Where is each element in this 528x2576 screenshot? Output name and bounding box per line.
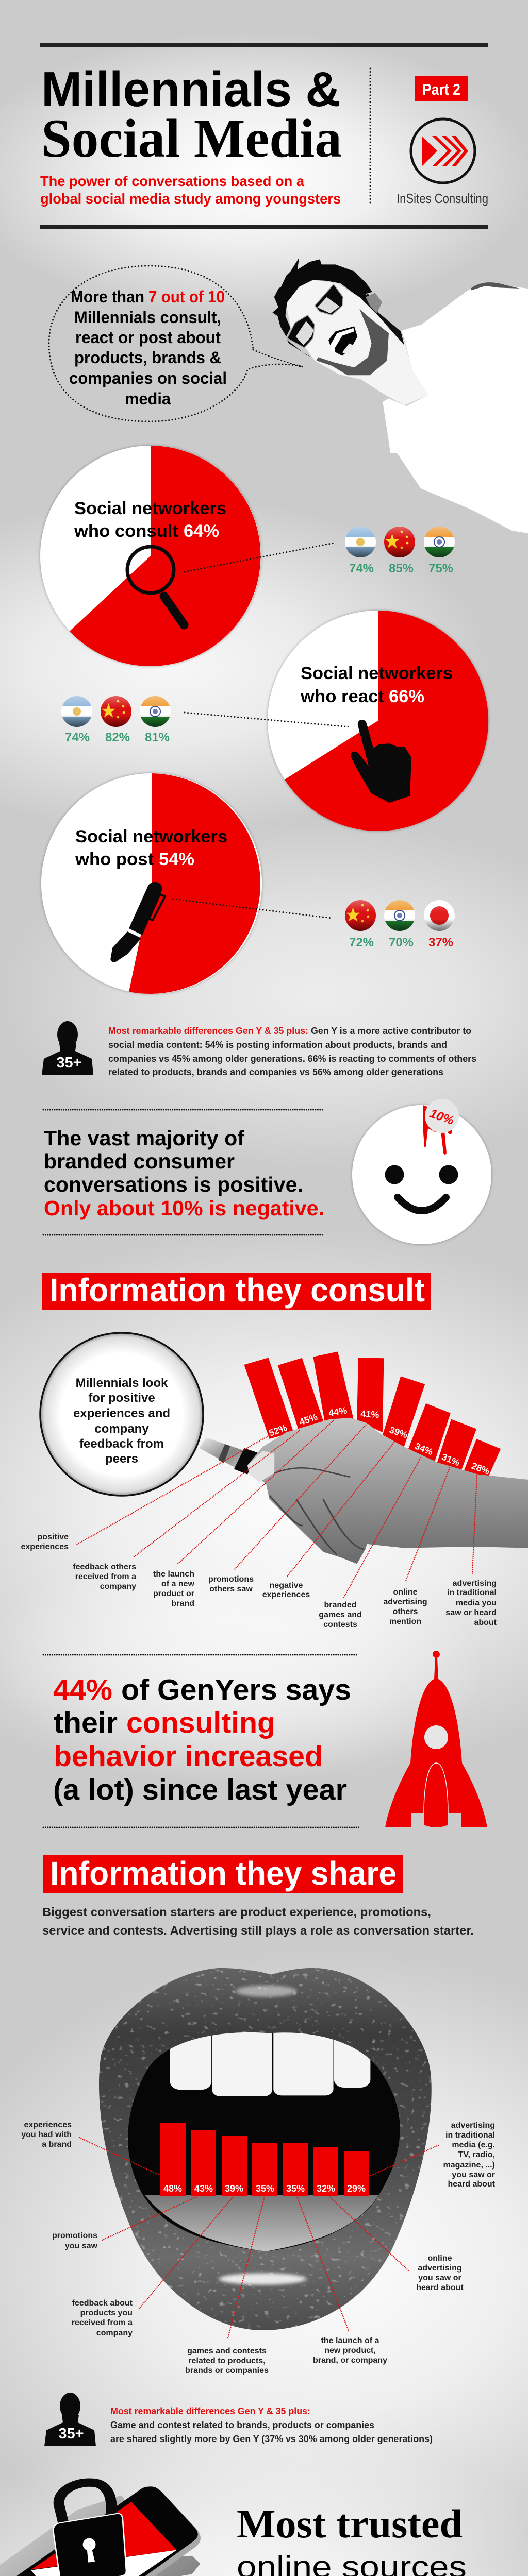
magnifier lens: Millennials look [76, 1376, 168, 1390]
bar fan chart: information consulted: 28% [470, 1461, 491, 1477]
labels: share: related to products, [188, 2357, 266, 2365]
labels: share: a brand [42, 2140, 72, 2149]
labels: consult: company [100, 1582, 136, 1591]
magnifier lens: experiences and [73, 1406, 170, 1420]
magnifier handle [200, 1437, 258, 1475]
speech bubble: react or post about [75, 328, 221, 347]
pie label [74, 499, 226, 541]
differences text: Game and contest related to brands, products or companies [110, 2420, 374, 2430]
share intro text: Biggest conversation starters are product experience, promotions, [42, 1905, 431, 1919]
bar chart: information shared [160, 2123, 369, 2196]
pie label: who post [75, 850, 154, 869]
labels: share: you saw [65, 2242, 98, 2250]
labels: share: you had with [21, 2130, 72, 2139]
labels: consult: the launch [153, 1570, 194, 1579]
labels: consult: brand [172, 1599, 194, 1608]
labels: share: games and contests [187, 2347, 267, 2355]
labels: consult: mention [389, 1617, 421, 1626]
flags: react: 82% [105, 731, 130, 744]
headline: 44% of GenYers: 44% [53, 1673, 112, 1706]
bar fan chart: information consulted: 45% [298, 1412, 319, 1427]
flags: react: 74% [65, 731, 90, 744]
pie label [300, 664, 453, 706]
bar fan chart: information consulted: 44% [328, 1405, 348, 1418]
pie: react [268, 611, 488, 831]
headline: 44% of GenYers: consulting [126, 1706, 275, 1739]
share intro text: service and contests. Advertising still plays a role as conversation starter. [42, 1924, 474, 1937]
icon: smiley with bite [352, 1099, 491, 1244]
bar fan chart: information consulted: 31% [440, 1451, 461, 1468]
labels: consult: promotions [208, 1575, 254, 1584]
padlock [53, 2483, 126, 2576]
bar fan chart: information consulted: 52% [268, 1422, 288, 1438]
lip highlights [219, 1986, 306, 2285]
labels: share: TV, radio, [458, 2150, 495, 2159]
callout: 35+ differences [42, 1021, 476, 1077]
labels: consult: negative [270, 1581, 303, 1590]
icon: person 35+ [42, 1021, 93, 1075]
labels: consult: in traditional [447, 1588, 497, 1597]
headline: positive conversations [44, 1126, 324, 1220]
flags: react: 81% [145, 731, 170, 744]
differences text [110, 2406, 433, 2444]
labels: share: new product, [324, 2346, 376, 2355]
pie label: who react [300, 687, 384, 706]
labels: share: brands or companies [185, 2366, 269, 2375]
labels: consult: of a new [161, 1580, 195, 1588]
flags: consult: 74% [349, 562, 374, 575]
speech bubble: 7 out of 10 [148, 287, 225, 306]
pie label: who consult [74, 521, 178, 541]
labels: consult: others saw [209, 1585, 253, 1594]
differences text: are shared slightly more by Gen Y (37% vs 30% among older generations) [110, 2434, 433, 2444]
speech bubble: media [125, 389, 171, 408]
speech bubble: Millennials consult, [74, 308, 221, 327]
hand [248, 1418, 528, 1564]
pie label: Social networkers [74, 499, 226, 518]
differences text: social media content: 54% is posting information about products, brands and [108, 1040, 447, 1050]
headline: positive conversations: branded consumer [44, 1149, 235, 1173]
labels: consult: product or [153, 1589, 194, 1598]
bar fan chart: information consulted [244, 1351, 501, 1477]
headline: 44% of GenYers [53, 1673, 351, 1806]
leader lines: share [79, 2138, 438, 2338]
heading: most trusted online sources [237, 2501, 467, 2576]
differences text: Most remarkable differences Gen Y & 35 plus: [110, 2406, 310, 2416]
headline: 44% of GenYers: (a lot) since last year [53, 1773, 347, 1806]
flags: consult [344, 526, 455, 575]
flags: post: 72% [349, 936, 374, 950]
flags: consult: 75% [428, 562, 453, 575]
part 2 badge [415, 76, 468, 101]
icon: person 35+: 35+ [58, 2426, 84, 2442]
labels: consult: about [474, 1618, 497, 1627]
icon: person 35+ [44, 2393, 96, 2446]
differences text: related to products, brands and companies vs 56% among older generations [108, 1067, 443, 1077]
bar fan chart: information consulted: 41% [360, 1409, 380, 1420]
InSites logo: InSites Consulting [397, 191, 488, 206]
labels: share [21, 2121, 496, 2375]
bar fan chart: information consulted: 34% [414, 1440, 435, 1457]
phone in hand with padlock [0, 2483, 201, 2576]
flags: post: 70% [389, 936, 414, 950]
labels: consult: contests [323, 1620, 357, 1629]
labels: share: you saw or [452, 2171, 495, 2179]
icon: person 35+: 35+ [56, 1055, 82, 1071]
headline: 44% of GenYers: behavior increased [54, 1740, 323, 1773]
subtitle [40, 173, 341, 207]
headline: 44% of GenYers: their [54, 1706, 118, 1739]
bar chart: information shared: 43% [194, 2183, 213, 2194]
hand with magnifying glass [40, 1333, 528, 1564]
bar chart: information shared: 29% [347, 2183, 366, 2194]
hand [0, 2495, 201, 2576]
labels: consult: experiences [21, 1543, 69, 1551]
InSites logo [397, 119, 488, 206]
speech bubble [49, 266, 303, 421]
differences text: Most remarkable differences Gen Y & 35 plus: [108, 1026, 308, 1036]
magnifier lens: feedback from [79, 1437, 164, 1451]
labels: share: feedback about [72, 2299, 133, 2308]
thumb [248, 1451, 274, 1482]
labels: share: online [427, 2254, 452, 2263]
title line 1: Millennials & [41, 62, 341, 117]
subtitle: The power of conversations based on a [40, 173, 304, 189]
heading: information they share: Information they share [50, 1855, 397, 1892]
labels: share: company [96, 2329, 133, 2337]
headline: positive conversations: Only about 10% is negative. [44, 1196, 324, 1220]
magnifier lens: company [94, 1422, 149, 1436]
labels: share: products you [80, 2309, 133, 2317]
differences text [108, 1026, 476, 1077]
labels: share: in traditional [446, 2131, 495, 2140]
pie label: Social networkers [301, 664, 453, 683]
headline: 44% of GenYers: of GenYers says [121, 1673, 351, 1706]
bar chart: information shared: 48% [163, 2183, 182, 2194]
icon: pen [110, 882, 165, 962]
differences text: Gen Y is a more active contributor to [311, 1026, 471, 1036]
lip gloss specks [99, 1968, 432, 2330]
bar chart: information shared: 35% [256, 2183, 274, 2194]
labels: share: advertising [418, 2264, 462, 2273]
magnifier lens: peers [105, 1452, 138, 1466]
labels: share: received from a [72, 2318, 133, 2327]
pie: post [41, 773, 262, 994]
labels: consult: others [393, 1607, 418, 1616]
pie label: 66% [389, 687, 424, 706]
differences text: companies vs 45% among older generations. 66% is reacting to comments of others [108, 1054, 476, 1064]
man with sunglasses [272, 258, 528, 533]
icon: rocket [385, 1651, 487, 1827]
bar chart: information shared: 39% [225, 2183, 243, 2194]
leader lines: consult [76, 1420, 477, 1598]
labels: share: magazine, ...) [443, 2161, 495, 2170]
shirt [383, 282, 528, 533]
tongue [145, 2195, 379, 2251]
labels: consult: positive [38, 1533, 69, 1541]
envelope [31, 2502, 177, 2570]
labels: consult [21, 1533, 497, 1629]
labels: consult: experiences [262, 1590, 310, 1599]
speech bubble: products, brands & [74, 348, 221, 367]
labels: consult: received from a [75, 1572, 136, 1581]
magnifier lens [40, 1333, 203, 1496]
pie: consult [40, 446, 261, 666]
bar chart: information shared: 35% [286, 2183, 305, 2194]
icon: magnifying glass [127, 547, 184, 625]
labels: consult: branded [324, 1601, 357, 1609]
speech bubble: companies on social [69, 369, 227, 387]
pie label: 64% [184, 521, 219, 541]
labels: share: advertising [451, 2121, 495, 2130]
labels: consult: games and [319, 1611, 362, 1619]
phone [7, 2486, 201, 2576]
flags: react [61, 696, 171, 744]
title line 2: Social Media [41, 108, 342, 168]
labels: share: media (e.g. [452, 2141, 495, 2149]
labels: share: heard about [416, 2283, 464, 2292]
icon: pointing hand [351, 720, 411, 803]
flags: post [344, 900, 455, 950]
pie label: Social networkers [75, 827, 227, 846]
icon: smiley with bite: 10% [428, 1107, 456, 1128]
labels: share: the launch of a [321, 2336, 380, 2345]
labels: share: experiences [24, 2121, 72, 2129]
labels: consult: feedback others [73, 1563, 136, 1571]
labels: share: you saw or [418, 2274, 461, 2282]
heading: most trusted online sources: Most trusted [237, 2501, 463, 2546]
heading: information they consult: Information they consult [50, 1272, 425, 1309]
labels: consult: advertising [383, 1598, 427, 1606]
labels: consult: advertising [453, 1579, 497, 1588]
part 2 badge: Part 2 [422, 80, 460, 98]
bar fan chart: information consulted: 39% [388, 1425, 409, 1440]
mouth interior [128, 2032, 400, 2251]
blood drips [423, 1105, 453, 1155]
magnifier lens: for positive [88, 1391, 155, 1405]
labels: consult: saw or heard [446, 1608, 497, 1617]
head [272, 258, 428, 405]
headline: positive conversations: conversations is positive. [44, 1173, 303, 1196]
labels: consult: online [393, 1588, 418, 1597]
labels: share: heard about [448, 2180, 496, 2189]
teeth [170, 2032, 370, 2096]
speech bubble: More than [71, 287, 144, 306]
labels: share: promotions [52, 2231, 97, 2240]
subtitle: global social media study among youngsters [40, 191, 341, 207]
labels: consult: media you [456, 1599, 497, 1607]
flags: post: 37% [428, 936, 453, 950]
header [40, 43, 488, 229]
bar chart: information shared: 32% [317, 2183, 335, 2194]
callout: 35+ differences share [44, 2393, 433, 2446]
pie label [75, 827, 227, 869]
flags: consult: 85% [389, 562, 414, 575]
headline: positive conversations: The vast majority of [44, 1126, 244, 1150]
lips illustration [99, 1968, 432, 2330]
labels: share: brand, or company [313, 2356, 387, 2365]
pie label: 54% [159, 850, 194, 869]
share intro text [42, 1905, 474, 1937]
